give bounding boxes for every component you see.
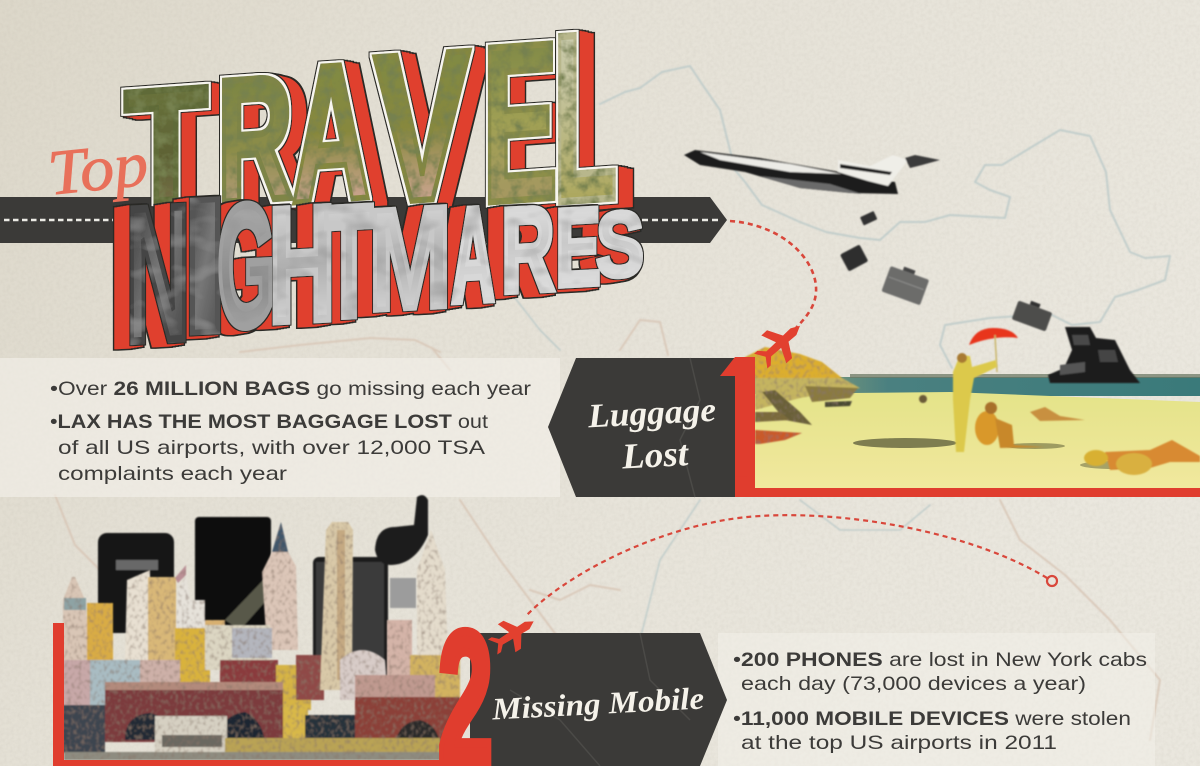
title word: NIGHTMARES: R — [501, 183, 555, 319]
beach umbrella and chair cluster — [745, 347, 860, 444]
text block: luggage facts: •LAX HAS THE MOST BAGGAGE LOST out — [50, 411, 489, 433]
title word: NIGHTMARES: G — [217, 169, 275, 364]
horizon treeline — [850, 374, 1200, 378]
title word: TRAVEL: E — [482, 0, 558, 251]
icon: red airplane 1 — [748, 312, 812, 375]
label text: Missing Mobile — [490, 680, 705, 727]
label text: Lost: Lost — [620, 433, 690, 477]
luggage pile — [1048, 327, 1140, 383]
text block: mobile facts: •11,000 MOBILE DEVICES were stolen — [733, 708, 1131, 730]
sea — [755, 377, 1200, 396]
title word: Top: Top — [44, 128, 151, 209]
title word: TRAVEL: A — [291, 21, 371, 245]
section 2 text band — [718, 633, 1155, 766]
text block: luggage facts — [50, 378, 532, 485]
road banner — [0, 197, 727, 243]
number 1 and red frame: 1 — [700, 314, 813, 541]
title word: NIGHTMARES: E — [555, 185, 601, 310]
title word: NIGHTMARES: N — [126, 165, 190, 383]
title word: NIGHTMARES: I — [181, 157, 229, 374]
red frame 2 — [53, 623, 443, 766]
illustration: jet airplane — [684, 150, 940, 194]
panel: Missing Mobile label — [470, 633, 727, 766]
illustration: beach scene — [745, 327, 1200, 489]
text block: mobile facts: at the top US airports in 2011 — [741, 732, 1057, 754]
illustration: mobile phones — [98, 495, 428, 682]
sand — [755, 392, 1200, 489]
title word: NIGHTMARES: H — [269, 172, 335, 356]
number 1 and red frame — [720, 357, 1200, 497]
text block: mobile facts: •200 PHONES are lost in New York cabs — [733, 649, 1147, 671]
red parasol — [969, 328, 1018, 372]
title word: NIGHTMARES: M — [368, 177, 452, 342]
title word: NIGHTMARES: T — [325, 173, 373, 349]
title word: TRAVEL: R — [217, 38, 293, 240]
text block: luggage facts: •Over 26 MILLION BAGS go missing each year — [50, 378, 532, 400]
tiny bag — [860, 211, 877, 225]
title word: NIGHTMARES — [126, 157, 644, 383]
title word: TRAVEL: T — [124, 53, 208, 237]
text block: mobile facts: each day (73,000 devices a year) — [741, 673, 1086, 695]
panel: Luggage Lost label — [548, 358, 736, 497]
gray suitcase — [881, 262, 931, 305]
title word: NIGHTMARES: S — [596, 191, 644, 297]
title word: TRAVEL — [124, 0, 617, 254]
icon: red airplane 2 — [484, 607, 542, 661]
section 1 text band — [0, 358, 560, 497]
shadows on the sand — [853, 438, 957, 448]
black briefcase — [840, 244, 868, 272]
title word: NIGHTMARES: A — [451, 180, 495, 332]
label text: Luggage: Luggage — [586, 392, 717, 435]
standing woman — [953, 353, 997, 452]
illustration: falling suitcases — [840, 211, 1054, 332]
distant sunbathers — [919, 395, 1085, 421]
dark suitcase — [1012, 297, 1054, 332]
title word: TRAVEL: V — [374, 4, 470, 249]
flight path 1 — [730, 221, 816, 328]
text block: mobile facts — [733, 649, 1147, 754]
text block: luggage facts: complaints each year — [58, 463, 288, 485]
flight path 2 — [526, 515, 1057, 616]
illustration: New York skyline — [63, 522, 460, 760]
text block: luggage facts: of all US airports, with over 12,000 TSA — [58, 437, 485, 459]
seated man — [975, 402, 1045, 448]
lying woman — [1084, 440, 1200, 475]
